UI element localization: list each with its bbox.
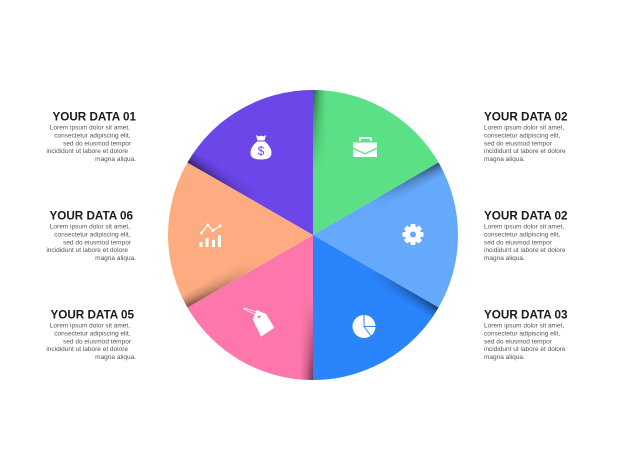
text block: your data 02 middle: incididunt ut labore et dolore (484, 247, 566, 254)
text block: your data 01: Lorem ipsum dolor sit amet, (50, 124, 130, 132)
infographic canvas (46, 90, 568, 380)
icon: pie chart (352, 314, 376, 338)
pie chart (168, 85, 458, 385)
text block: your data 02 middle: Lorem ipsum dolor sit amet, (484, 224, 564, 230)
text block: your data 03: YOUR DATA 03 (484, 308, 568, 322)
text block: your data 01: YOUR DATA 01 (52, 110, 136, 124)
text block: your data 05 (46, 308, 136, 361)
text block: your data 02 middle: magna aliqua. (484, 255, 525, 262)
text block: your data 05: incididunt ut labore et dolore (46, 346, 128, 353)
text block: your data 02 top: Lorem ipsum dolor sit amet, (484, 124, 564, 132)
text block: your data 02 middle: YOUR DATA 02 (484, 210, 568, 222)
text block: your data 01: sed do eiusmod tempor (63, 140, 132, 147)
text block: your data 02 top: sed do eiusmod tempor (484, 140, 553, 147)
text block: your data 02 middle: sed do eiusmod tempor (484, 239, 553, 246)
text block: your data 02 top: incididunt ut labore et dolore (484, 148, 566, 155)
segment: green (313, 90, 439, 235)
text block: your data 06 (46, 210, 136, 262)
text block: your data 06: incididunt ut labore et dolore (46, 247, 128, 254)
icon: line and bar chart (200, 224, 222, 247)
text block: your data 02 top: consectetur adipiscing elit, (484, 132, 560, 140)
text block: your data 05: Lorem ipsum dolor sit amet, (50, 322, 130, 330)
segment: purple (187, 90, 313, 235)
text block: your data 01: consectetur adipiscing elit, (54, 132, 131, 140)
text block: your data 03: Lorem ipsum dolor sit amet, (484, 322, 564, 330)
text block: your data 06: Lorem ipsum dolor sit amet, (50, 224, 130, 230)
text block: your data 03: magna aliqua. (484, 354, 525, 361)
segment: blue (313, 235, 439, 380)
text block: your data 06: sed do eiusmod tempor (63, 239, 132, 246)
text block: your data 05: consectetur adipiscing elit, (54, 330, 131, 338)
icon: briefcase (353, 137, 377, 157)
segment: pink (187, 235, 313, 380)
text block: your data 03: consectetur adipiscing elit, (484, 330, 560, 338)
segment: peach (168, 162, 313, 308)
text block: your data 06: magna aliqua. (95, 255, 136, 262)
icon: money bag (250, 135, 272, 160)
text block: your data 02 top (484, 110, 568, 163)
text block: your data 05: magna aliqua. (95, 354, 136, 361)
text block: your data 06: YOUR DATA 06 (49, 210, 133, 222)
text block: your data 03 (484, 308, 568, 361)
text block: your data 02 top: YOUR DATA 02 (484, 110, 568, 124)
text block: your data 02 middle: consectetur adipiscing elit, (484, 232, 560, 238)
text block: your data 05: YOUR DATA 05 (50, 308, 134, 322)
text block: your data 01: magna aliqua. (95, 156, 136, 163)
icon: gear (402, 224, 424, 245)
text block: your data 03: incididunt ut labore et dolore (484, 346, 566, 353)
text block: your data 06: consectetur adipiscing elit, (54, 232, 131, 238)
text block: your data 01: incididunt ut labore et dolore (46, 148, 128, 155)
text block: your data 02 middle (484, 210, 568, 262)
text block: your data 01 (46, 110, 136, 163)
icon: price tag (243, 308, 274, 337)
icon: money bag: $ (258, 146, 265, 158)
segment: light blue (313, 162, 458, 308)
text block: your data 03: sed do eiusmod tempor (484, 338, 553, 345)
text block: your data 05: sed do eiusmod tempor (63, 338, 132, 345)
segment shadows (177, 85, 449, 385)
text block: your data 02 top: magna aliqua. (484, 156, 525, 163)
